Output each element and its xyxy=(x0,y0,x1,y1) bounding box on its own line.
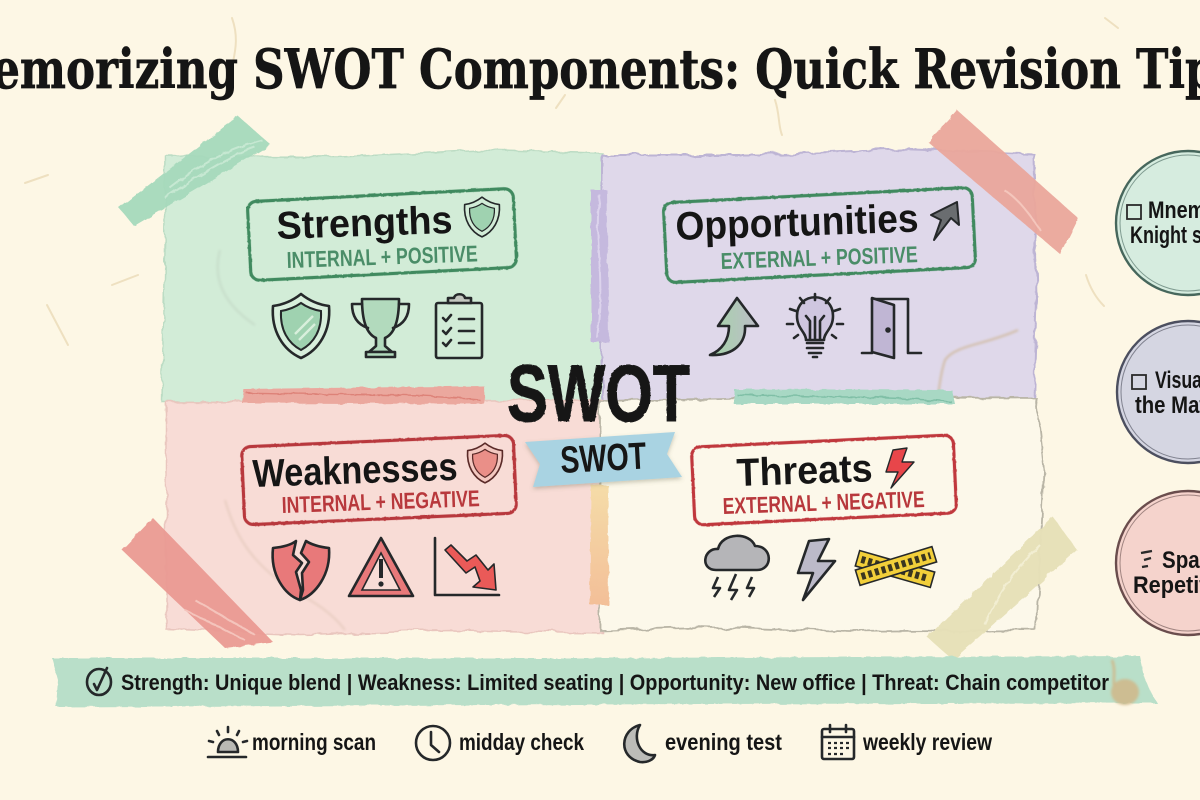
tape: green horizontal xyxy=(734,389,955,404)
tip circle: visual xyxy=(1117,321,1200,463)
panel: weaknesses xyxy=(166,400,602,634)
icon: broken shield xyxy=(273,541,329,600)
heading: opportunities: EXTERNAL + POSITIVE xyxy=(720,241,918,274)
icon: small shield xyxy=(468,443,502,483)
icon: warning triangle xyxy=(349,538,413,596)
icon: falling chart xyxy=(435,538,499,595)
icon: light bulb xyxy=(787,294,843,357)
icon: storm cloud xyxy=(705,536,769,600)
tape: purple vertical xyxy=(591,190,609,342)
heading: opportunities xyxy=(663,187,976,283)
icon: shield xyxy=(273,294,329,358)
icon: sunrise xyxy=(208,727,247,757)
tip circle: mnemonic xyxy=(1116,151,1200,295)
heading: opportunities: Opportunities xyxy=(675,197,919,249)
icon: calendar xyxy=(822,725,854,759)
example text: Strength: Unique blend | Weakness: Limited seating | Opportunity: New office | Threat: Chain competitor xyxy=(121,670,1109,695)
tip circle: spaced repetition xyxy=(1116,491,1200,635)
heading: strengths xyxy=(247,188,517,281)
icon: small red bolt xyxy=(886,448,914,488)
heading: threats xyxy=(691,435,957,525)
icon: clock xyxy=(416,726,450,760)
icon: door xyxy=(862,298,921,358)
text: morning scan: morning scan xyxy=(252,729,376,755)
heading: weaknesses: Weaknesses xyxy=(252,446,458,496)
heading: threats: EXTERNAL + NEGATIVE xyxy=(722,486,925,519)
icon: check circle xyxy=(87,668,111,695)
tape: bottom right cream xyxy=(927,517,1077,660)
panel: threats xyxy=(600,397,1044,632)
stain xyxy=(1111,660,1139,705)
icon: growth arrow xyxy=(710,298,758,355)
tape: peach vertical xyxy=(590,485,609,605)
icon: clipboard xyxy=(436,294,482,358)
ribbon: SWOT: SWOT xyxy=(559,436,647,482)
heading: weaknesses xyxy=(241,435,517,525)
heading: threats: Threats xyxy=(736,447,873,495)
ribbon: SWOT xyxy=(525,432,682,487)
text: weekly review: weekly review xyxy=(862,729,992,755)
icon: small shield xyxy=(465,197,499,237)
heading: strengths: Strengths xyxy=(276,199,453,248)
icon: lightning bolt xyxy=(798,539,835,600)
text: evening test: evening test xyxy=(665,729,782,755)
panel: strengths xyxy=(162,150,602,402)
icon: caution tape xyxy=(855,547,937,587)
schedule row xyxy=(208,725,992,762)
icon: trophy xyxy=(352,299,409,357)
tape: top right red xyxy=(928,110,1078,254)
heading: weaknesses: INTERNAL + NEGATIVE xyxy=(281,485,480,518)
tape: top left green xyxy=(119,116,271,226)
example band xyxy=(52,656,1157,707)
icon: small arrow xyxy=(931,202,959,240)
center label: SWOT: SWOT xyxy=(507,349,690,439)
center label: SWOT xyxy=(507,349,690,487)
panel: opportunities xyxy=(602,149,1037,402)
icon: moon xyxy=(624,725,655,762)
tape: bottom left red xyxy=(122,518,273,648)
tape: red horizontal xyxy=(242,386,485,404)
text: midday check: midday check xyxy=(459,729,584,755)
heading: strengths: INTERNAL + POSITIVE xyxy=(286,240,478,273)
